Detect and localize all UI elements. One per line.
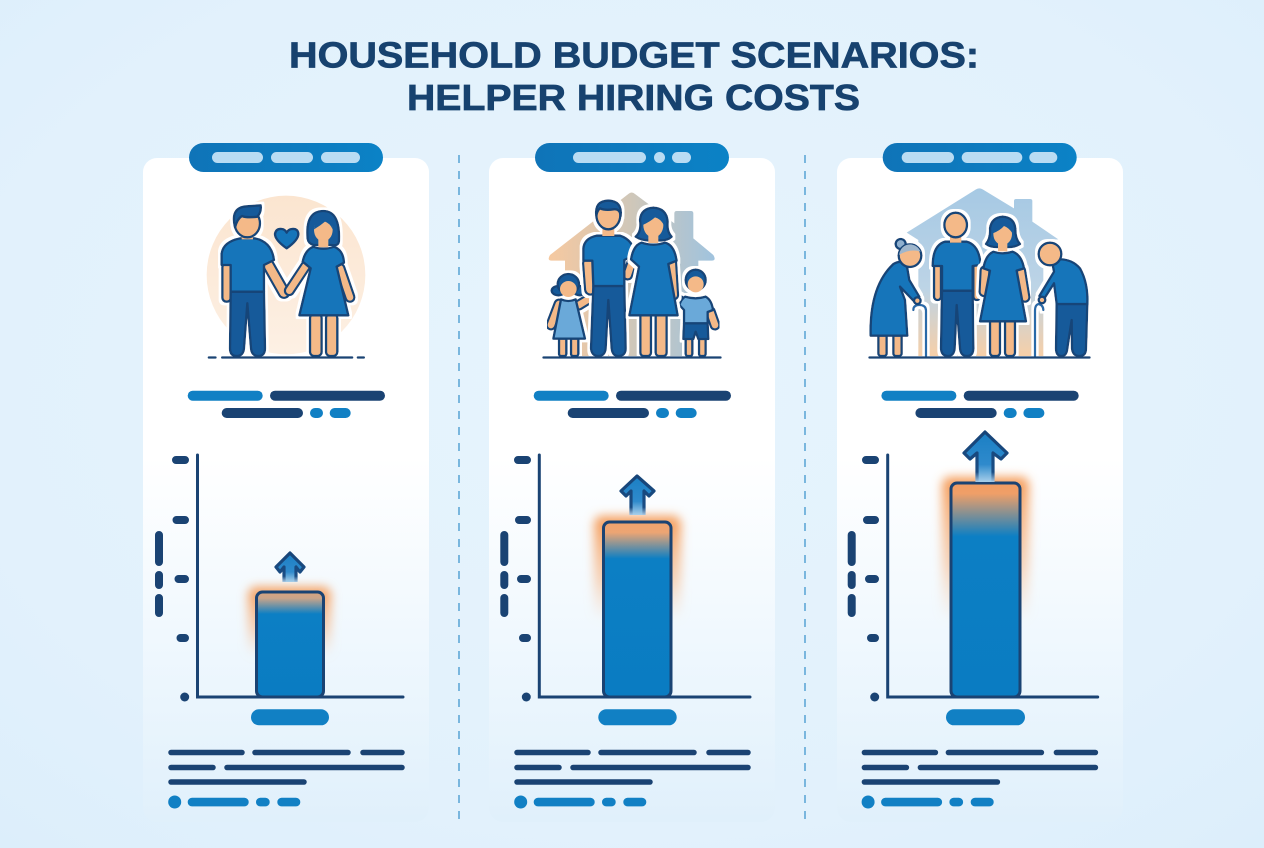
title [289, 34, 979, 118]
header pill [189, 143, 383, 172]
card background [143, 158, 429, 822]
label bars [534, 391, 731, 418]
panel: family with children scenario [489, 143, 775, 822]
panel: multigenerational household scenario [837, 143, 1123, 822]
axis label pill [251, 709, 329, 725]
title: HELPER HIRING COSTS [407, 77, 860, 118]
panel: couple scenario [143, 143, 429, 822]
icon: couple holding hands [207, 196, 365, 359]
axis label pill [946, 709, 1025, 725]
description lines [862, 752, 1095, 808]
label bars [881, 391, 1079, 418]
bar chart: couple [159, 455, 403, 702]
card background [837, 158, 1123, 822]
header pill [883, 143, 1077, 172]
bar chart: family [504, 455, 750, 702]
icon: couple with elderly parents and house [868, 188, 1091, 359]
card background [489, 158, 775, 822]
header pill [535, 143, 729, 172]
description lines [514, 752, 748, 808]
title: HOUSEHOLD BUDGET SCENARIOS: [289, 34, 979, 76]
bar chart: multigenerational [852, 432, 1098, 702]
label bars [188, 391, 385, 418]
icon: family of four and house [542, 192, 722, 359]
axis label pill [598, 709, 677, 725]
description lines [168, 752, 402, 808]
